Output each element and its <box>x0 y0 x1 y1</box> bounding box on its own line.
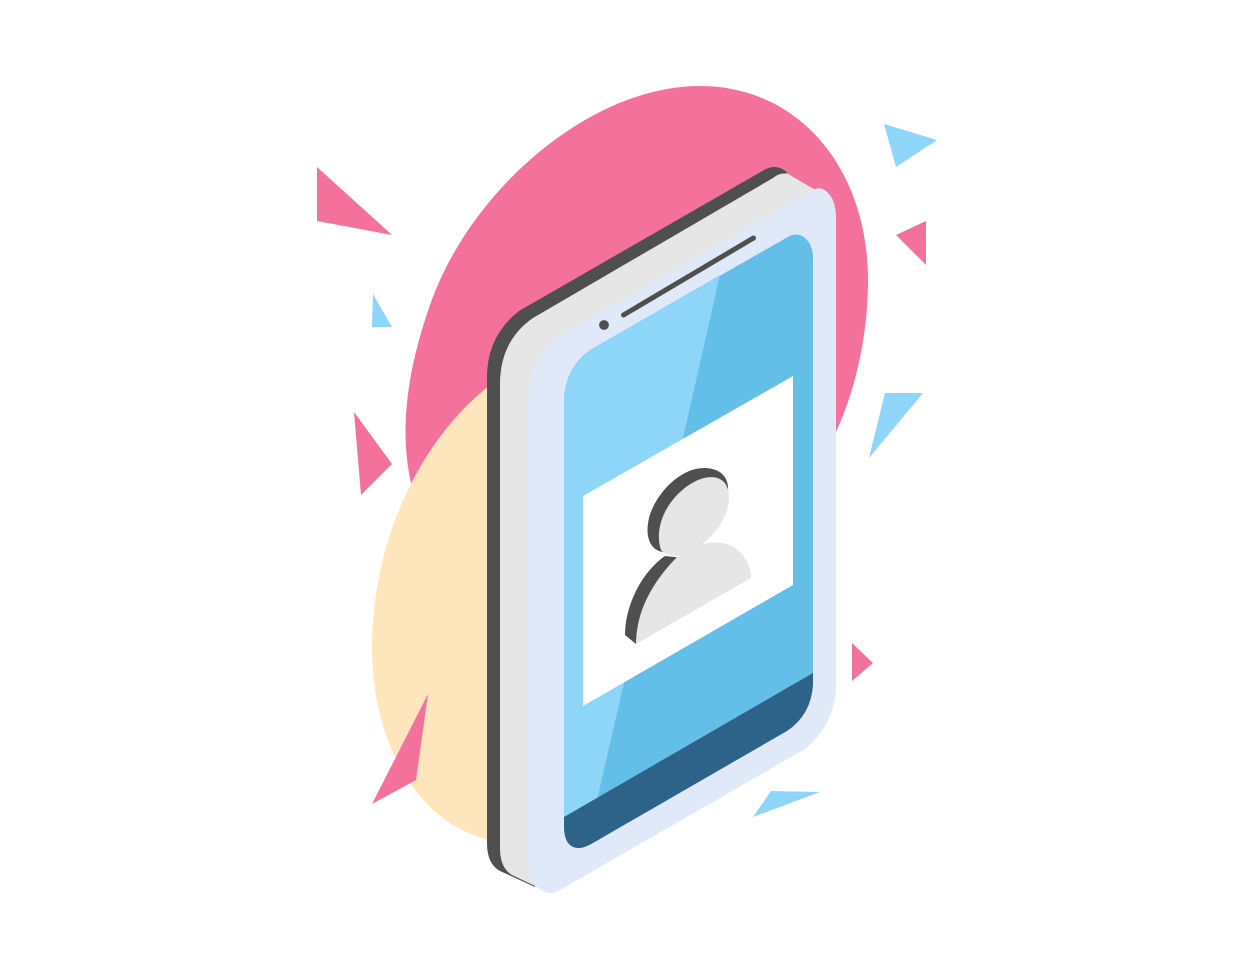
head shadow <box>648 468 728 552</box>
screen blue <box>564 234 813 825</box>
phone side grey <box>500 174 819 886</box>
body shadow <box>625 556 684 644</box>
speaker slot <box>624 238 754 315</box>
triangle pink bottom-left <box>372 694 428 804</box>
triangle pink left <box>354 412 392 495</box>
triangle pink right <box>896 221 926 265</box>
white card <box>583 376 793 706</box>
phone front body <box>528 188 836 893</box>
triangle blue left <box>372 294 392 327</box>
camera dot <box>599 320 609 330</box>
triangle blue bottom-right <box>753 791 820 817</box>
screen bottom dark band <box>564 673 813 848</box>
cream blob <box>372 385 520 840</box>
head <box>659 477 729 556</box>
phone back edge dark <box>487 167 787 887</box>
triangle blue top-right <box>884 124 937 167</box>
triangle blue right <box>869 393 923 458</box>
body <box>636 542 751 644</box>
triangle pink lower-right <box>852 643 873 681</box>
user icon <box>625 468 751 644</box>
triangle pink top-left <box>317 167 392 235</box>
pink blob <box>406 86 868 600</box>
screen light reflection <box>564 275 720 820</box>
